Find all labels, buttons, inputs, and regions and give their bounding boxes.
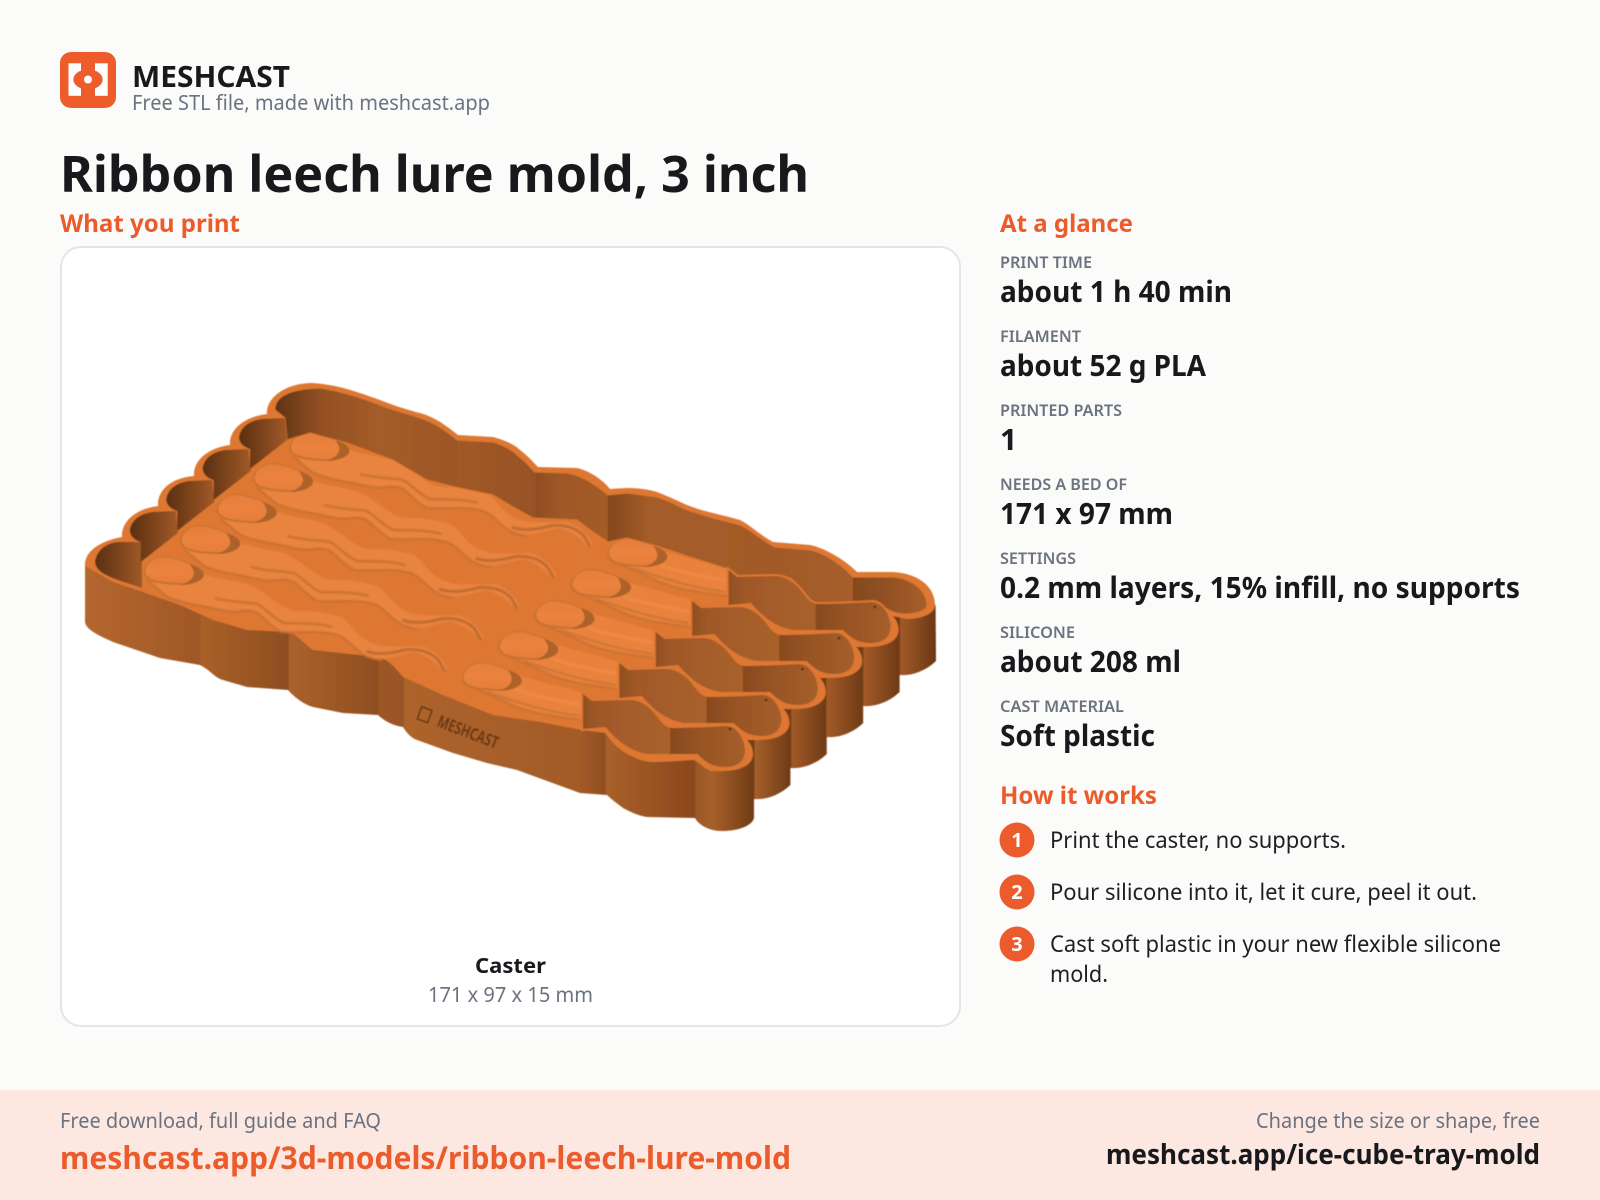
stat: cast material: CAST MATERIAL	[1000, 694, 1124, 717]
panel card	[61, 247, 960, 1026]
footer right label: Change the size or shape, free	[1256, 1107, 1540, 1135]
stat: cast material	[1000, 694, 1155, 755]
panel: at a glance	[1000, 207, 1520, 755]
outer side wall	[85, 563, 936, 831]
stat: silicone: SILICONE	[1000, 620, 1075, 643]
short leech cavities	[464, 552, 727, 720]
rear wall	[275, 388, 927, 614]
stat: bed size: NEEDS A BED OF	[1000, 472, 1127, 495]
stat: printed parts: PRINTED PARTS	[1000, 398, 1122, 421]
heading: how it works: How it works	[1000, 779, 1157, 812]
stat: silicone	[1000, 620, 1181, 681]
top face and floor	[85, 383, 935, 771]
stat: printed parts: 1	[1000, 418, 1017, 459]
stat: print time	[1000, 250, 1232, 311]
embossed logo on the side wall: MESHCAST	[434, 709, 502, 754]
long leech cavities	[147, 450, 593, 671]
stat: printed parts	[1000, 398, 1122, 459]
brand tagline: Free STL file, made with meshcast.app	[132, 89, 490, 117]
stat: print time: about 1 h 40 min	[1000, 270, 1232, 311]
stat: settings: 0.2 mm layers, 15% infill, no supports	[1000, 566, 1520, 607]
brand name: MESHCAST	[132, 55, 290, 96]
stat: filament	[1000, 324, 1206, 385]
caption: part size: 171 x 97 x 15 mm	[428, 981, 593, 1009]
step 3: Cast soft plastic in your new flexible silicone	[1050, 927, 1501, 959]
step 2: 2	[1011, 878, 1023, 905]
pin holes	[729, 606, 876, 730]
footer main link: meshcast.app/3d-models/ribbon-leech-lure-mold	[60, 1137, 791, 1179]
step 3: mold.	[1050, 957, 1108, 989]
heading: what you print: What you print	[60, 207, 240, 240]
left lobe walls	[95, 418, 287, 588]
heading: at a glance: At a glance	[1000, 207, 1133, 240]
step 3: 3	[1011, 930, 1023, 957]
step 1: 1	[1011, 826, 1023, 853]
panel: caster model	[61, 247, 960, 1026]
step 2: Pour silicone into it, let it cure, peel it out.	[1050, 875, 1477, 907]
header: brand logo and name	[60, 52, 490, 117]
caption: part name: Caster	[475, 952, 547, 980]
icon: Meshcast logo	[60, 52, 116, 108]
3D render of the caster mold	[85, 383, 936, 831]
title: Ribbon leech lure mold, 3 inch	[60, 139, 809, 207]
stat: cast material: Soft plastic	[1000, 714, 1155, 755]
step 1: Print the caster, no supports.	[1050, 823, 1346, 855]
finger cavity walls	[582, 568, 892, 768]
stat: print time: PRINT TIME	[1000, 250, 1092, 273]
leech head pockets	[143, 432, 667, 691]
footer left label: Free download, full guide and FAQ	[60, 1107, 381, 1135]
stat: filament: about 52 g PLA	[1000, 344, 1206, 385]
stat: settings	[1000, 546, 1520, 607]
step 3	[1000, 926, 1501, 989]
stat: bed size	[1000, 472, 1173, 533]
stat: bed size: 171 x 97 mm	[1000, 492, 1173, 533]
footer band	[0, 1090, 1600, 1200]
stat: silicone: about 208 ml	[1000, 640, 1181, 681]
stat: settings: SETTINGS	[1000, 546, 1076, 569]
footer right link: meshcast.app/ice-cube-tray-mold	[1106, 1135, 1540, 1173]
panel: how it works	[1000, 779, 1501, 989]
embossed logo on the side wall	[417, 707, 502, 754]
stat: filament: FILAMENT	[1000, 324, 1082, 347]
